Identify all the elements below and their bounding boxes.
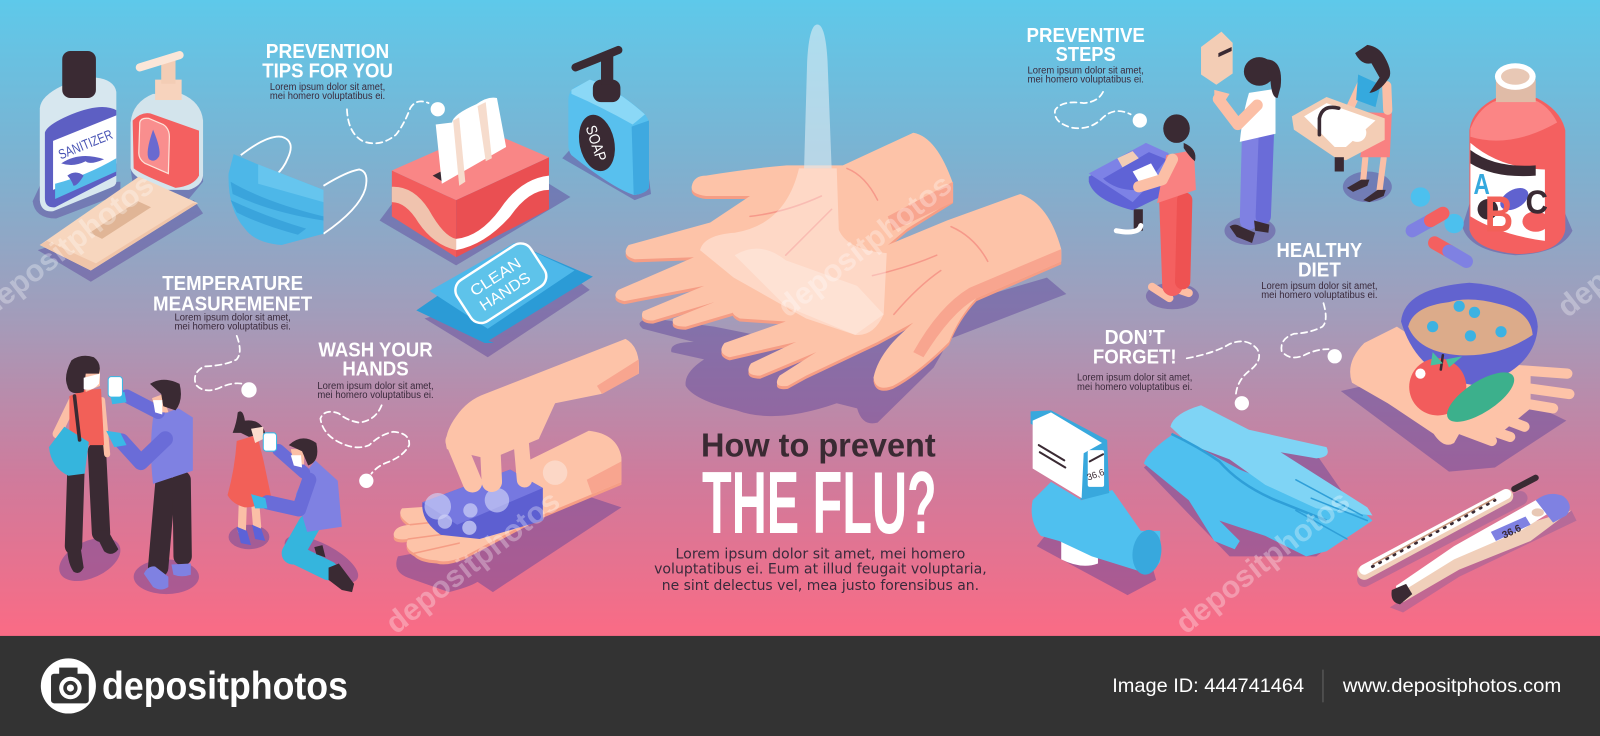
figure: woman washing at purple sink [1089, 114, 1199, 309]
heading: wash your hands [317, 339, 434, 401]
website url: www.depositphotos.com [1342, 675, 1561, 697]
logo: camera icon [41, 658, 96, 714]
heading: wash your hands: WASH YOUR [318, 339, 433, 361]
lower hand [394, 431, 621, 564]
heading: temperature measurement: mei homero voluptatibus ei. [174, 322, 291, 333]
heading: don't forget: DON’T [1105, 327, 1165, 349]
illustration: peach wet wipes packet [38, 177, 203, 282]
heading: prevention tips: TIPS FOR YOU [262, 61, 393, 83]
illustration: red syrup bottle with vitamins [1411, 63, 1572, 261]
illustration: hands holding soap bar [394, 339, 639, 592]
figure: girl in red dress [228, 411, 271, 549]
heading: wash your hands: HANDS [342, 359, 409, 381]
heading: don't forget: mei homero voluptatibus ei. [1077, 382, 1192, 393]
title: the flu: THE FLU? [702, 454, 937, 552]
dashed connector: temperature [195, 336, 257, 398]
figure: woman washing at peach sink [1292, 45, 1392, 202]
watermarks: depositphotos [379, 484, 566, 640]
illustration: central hands under water [615, 24, 1066, 423]
heading: prevention tips [262, 41, 393, 102]
front hand [721, 194, 1061, 391]
soap bar [422, 460, 567, 539]
figure: kneeling man [251, 433, 365, 592]
illustration: clean hands wipes pack: CLEAN [467, 255, 524, 300]
illustration: digital thermometer [1390, 494, 1577, 612]
figure: man with thermometer gun [106, 377, 199, 594]
heading: temperature measurement: TEMPERATURE [162, 273, 303, 295]
heading: wash your hands: Lorem ipsum dolor sit amet, [317, 381, 434, 392]
illustration: mercury thermometer [1364, 478, 1536, 580]
heading: temperature measurement: Lorem ipsum dolor sit amet, [174, 313, 291, 324]
upper hand [446, 339, 639, 483]
group: people measuring temperature [49, 356, 365, 594]
dashed connector: wash hands [320, 405, 409, 488]
illustration: clean hands wipes pack: HANDS [477, 269, 534, 315]
illustration: clean hands wipes pack [416, 239, 593, 357]
heading: temperature measurement: MEASUREMENET [153, 293, 313, 315]
body text: introduction: Lorem ipsum dolor sit amet, mei homero [676, 546, 965, 562]
back hand [615, 133, 953, 330]
illustration: red tissue box [380, 98, 570, 265]
heading: healthy diet: mei homero voluptatibus ei. [1261, 290, 1378, 301]
heading: preventive steps: mei homero voluptatibus ei. [1028, 75, 1144, 86]
heading: don't forget: Lorem ipsum dolor sit amet, [1077, 373, 1192, 384]
image id: Image ID: 444741464 [1112, 675, 1304, 697]
heading: temperature measurement [153, 273, 313, 333]
dashed connector: preventive steps [1055, 92, 1147, 128]
illustration: infrared thermometer in gloved hand: 36,6 [1085, 467, 1106, 483]
heading: healthy diet: Lorem ipsum dolor sit amet, [1261, 281, 1378, 292]
title: how to prevent: How to prevent [701, 427, 936, 464]
illustration: blue soap dispenser: SOAP [582, 123, 609, 164]
dashed connector: healthy diet [1281, 303, 1342, 363]
illustration: hand with bowl, apple and cucumber [1341, 283, 1569, 472]
heading: prevention tips: mei homero voluptatibus ei. [270, 91, 385, 102]
watermarks: depositphotos [1169, 484, 1356, 640]
watermarks: depositphotos [771, 167, 958, 324]
hand shadow [639, 278, 1066, 423]
heading: healthy diet: HEALTHY [1277, 240, 1363, 262]
illustration: red pump bottle [131, 55, 203, 199]
figure: woman at hand dryer [1201, 32, 1281, 245]
heading: healthy diet [1261, 240, 1378, 301]
illustration: red syrup bottle with vitamins: A [1473, 169, 1490, 201]
illustration: red syrup bottle with vitamins: B [1485, 186, 1513, 243]
heading: prevention tips: Lorem ipsum dolor sit amet, [270, 82, 385, 93]
illustration: blue medical mask [229, 137, 366, 245]
illustration: blue rubber gloves [1144, 405, 1372, 556]
heading: wash your hands: mei homero voluptatibus ei. [317, 390, 434, 401]
watermarks [0, 167, 1600, 640]
heading: don't forget [1077, 327, 1192, 393]
body text: introduction [654, 546, 987, 594]
illustration: blue soap dispenser [562, 50, 651, 200]
heading: preventive steps: Lorem ipsum dolor sit amet, [1028, 65, 1144, 76]
illustration: infrared thermometer in gloved hand [1031, 410, 1164, 595]
heading: don't forget: FORGET! [1093, 346, 1177, 368]
heading: preventive steps [1027, 25, 1145, 86]
illustration: sanitizer gel bottle [33, 51, 120, 218]
body text: introduction: voluptatibus ei. Eum at illud feugait voluptaria, [654, 562, 987, 578]
dashed connector: prevention tips [347, 101, 445, 143]
heading: healthy diet: DIET [1298, 260, 1341, 282]
body text: introduction: ne sint delectus vel, mea justo forensibus an. [662, 578, 979, 594]
figure: woman with bag [49, 356, 127, 590]
footer bar [0, 636, 1600, 736]
logo: wordmark: depositphotos [102, 665, 348, 708]
illustration: red syrup bottle with vitamins: C [1526, 184, 1548, 221]
heading: prevention tips: PREVENTION [266, 41, 389, 63]
dashed connector: don't forget [1187, 341, 1259, 410]
illustration: sanitizer gel bottle: SANITIZER [56, 127, 115, 162]
illustration: digital thermometer: 36.6 [1501, 523, 1524, 541]
water stream and puddle [700, 24, 887, 335]
heading: preventive steps: STEPS [1056, 44, 1116, 66]
heading: preventive steps: PREVENTIVE [1027, 25, 1145, 47]
